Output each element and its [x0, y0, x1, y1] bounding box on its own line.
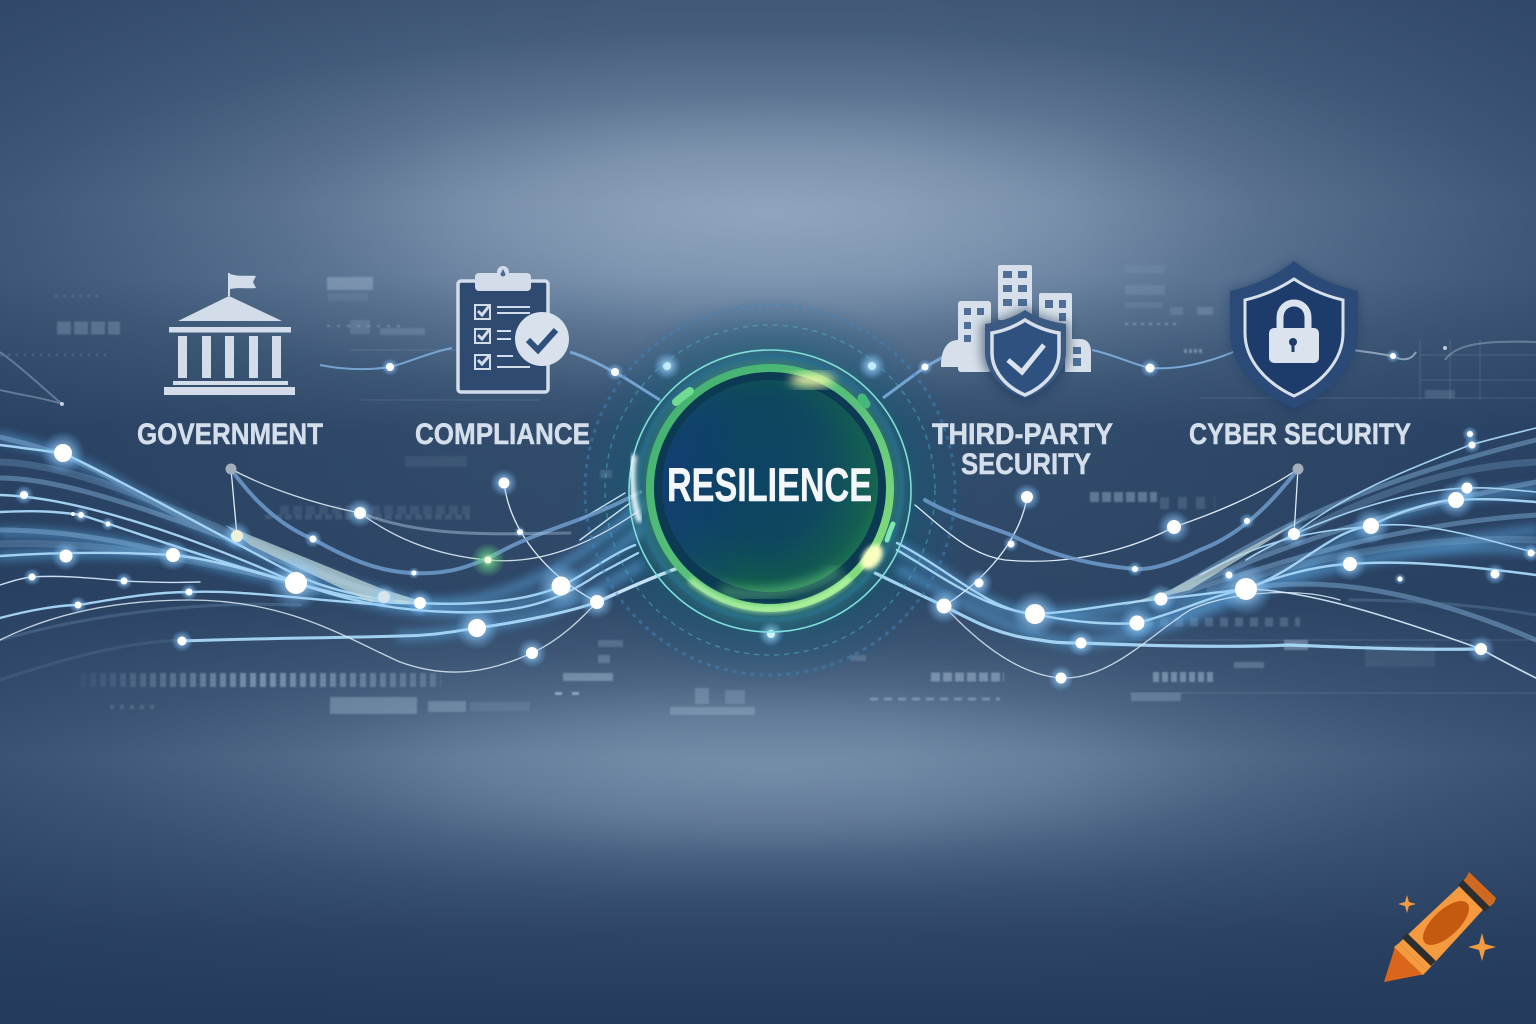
resilience hub	[585, 305, 955, 675]
label: government: GOVERNMENT	[137, 418, 323, 451]
hub highlights	[632, 373, 893, 610]
background data blocks	[0, 265, 1455, 715]
hub green ring	[650, 368, 890, 608]
left thin links from grey node	[0, 469, 640, 672]
left broad fibers	[0, 437, 540, 680]
fiber streams right	[875, 428, 1536, 678]
icon: cyber security shield	[1230, 261, 1358, 412]
label: compliance: COMPLIANCE	[415, 418, 590, 451]
hub dark disc	[650, 368, 890, 608]
left fiber glow	[0, 437, 640, 636]
hub title: RESILIENCE	[667, 458, 872, 511]
left converging light wedge	[225, 525, 430, 604]
icon: third-party security	[941, 265, 1091, 402]
right thick link	[925, 469, 1298, 569]
icon: compliance clipboard	[458, 266, 569, 392]
top connector lines	[0, 342, 1536, 404]
right bright fibers	[875, 428, 1536, 678]
label: cyber security: CYBER SECURITY	[1189, 418, 1411, 451]
left bright fibers	[0, 445, 678, 641]
icon: government building	[164, 273, 295, 395]
network nodes	[14, 346, 1536, 691]
hub glow	[648, 368, 892, 612]
right fiber glow	[900, 490, 1536, 643]
right converging light wedge	[1122, 515, 1310, 606]
background grid lines	[350, 340, 1536, 693]
left thick link	[231, 469, 640, 573]
label: third-party security: SECURITY	[961, 448, 1091, 481]
central circle aura	[565, 295, 975, 685]
right broad fibers	[1161, 440, 1536, 640]
label: third-party security: THIRD-PARTY	[932, 418, 1113, 451]
hub outer dashed rings	[585, 305, 955, 675]
right thin links from grey node	[915, 469, 1340, 678]
label: third-party security	[932, 418, 1113, 481]
icon: crayon logo	[1384, 872, 1496, 982]
fiber streams left	[0, 437, 678, 680]
hub sphere	[662, 380, 878, 592]
